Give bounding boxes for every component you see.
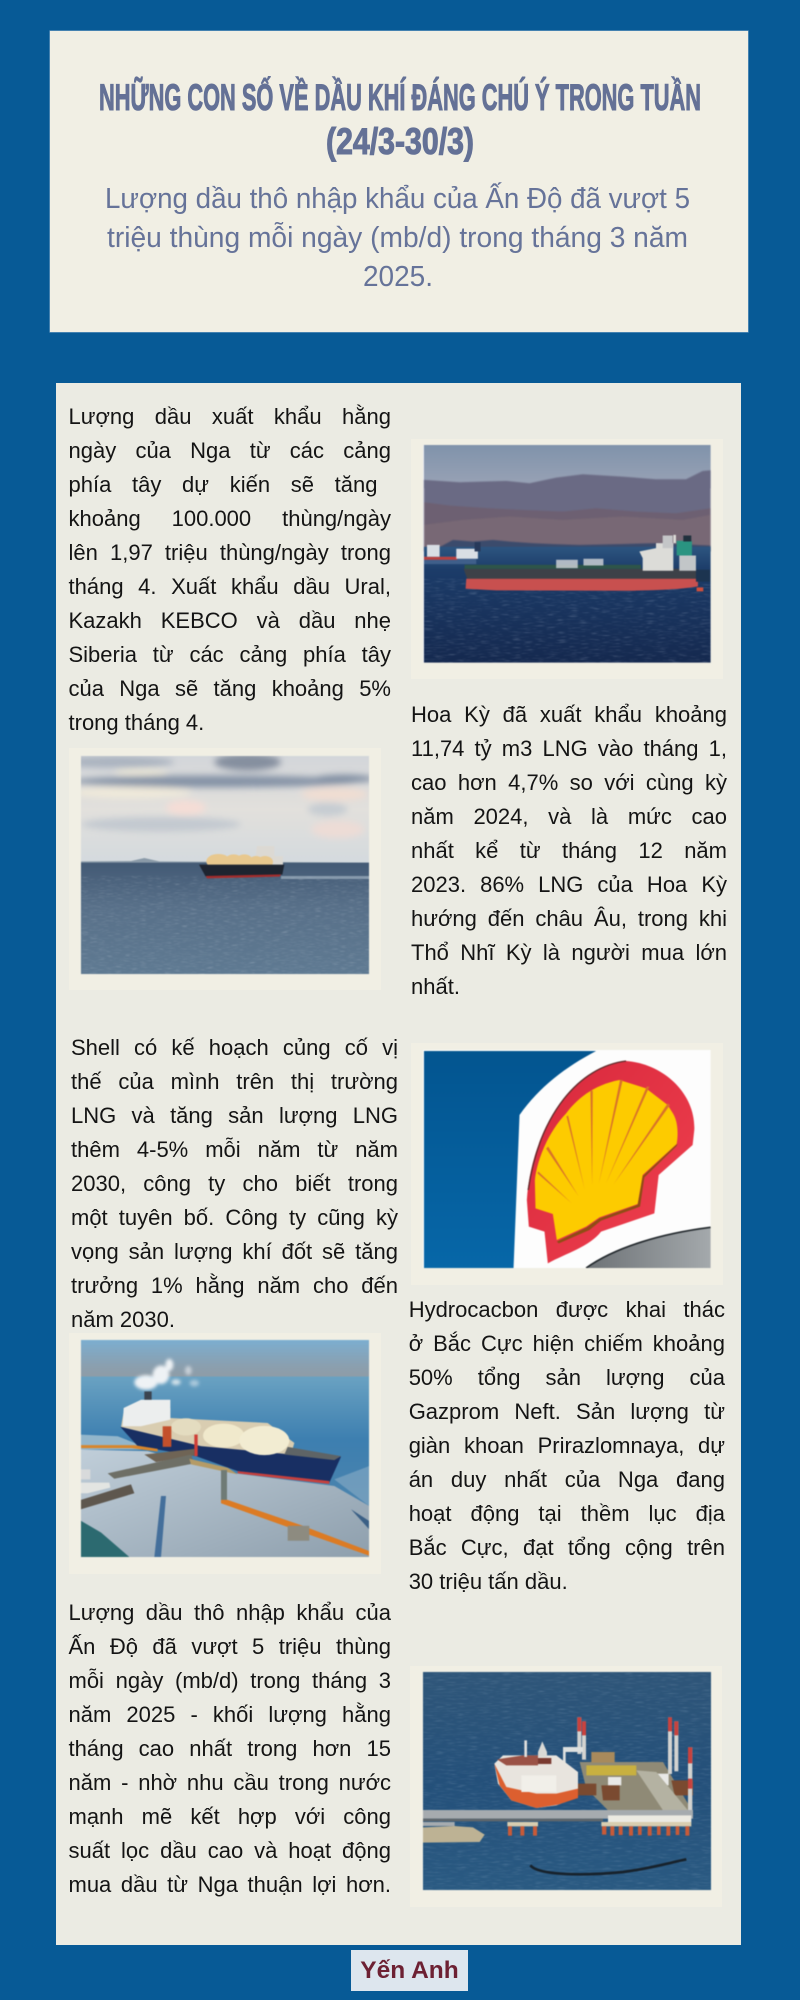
image: tanker at sea bbox=[411, 438, 723, 679]
carrier bbox=[120, 1427, 341, 1483]
image: LNG carrier under cloudy sky bbox=[68, 748, 381, 990]
image: offshore oil terminal bbox=[410, 1666, 722, 1907]
text block: US LNG exports: 2023. 86% LNG của Hoa Kỳ bbox=[411, 872, 727, 896]
text block: US LNG exports bbox=[411, 702, 727, 998]
subtitle: triệu thùng mỗi ngày (mb/d) trong tháng 3 năm bbox=[107, 221, 688, 254]
distant ships bbox=[424, 556, 477, 564]
text block: India crude imports: tháng cao nhất trong hơn 15 bbox=[68, 1736, 391, 1761]
signature bbox=[351, 1950, 468, 1991]
text block: Shell LNG plan: một tuyên bố. Công ty cũng kỳ bbox=[71, 1205, 398, 1230]
text block: Russia exports: lên 1,97 triệu thùng/ngày trong bbox=[68, 540, 391, 564]
jetty bbox=[81, 1445, 158, 1451]
subtitle bbox=[105, 181, 690, 293]
text block: India crude imports: Lượng dầu thô nhập khẩu của bbox=[68, 1600, 391, 1625]
text block: Russia exports: phía tây dự kiến sẽ tăng bbox=[68, 472, 378, 496]
panel: header bbox=[50, 30, 748, 332]
text block: Russia exports: ngày của Nga từ các cảng bbox=[68, 438, 391, 462]
text block: Russia exports: Lượng dầu xuất khẩu hằng bbox=[68, 404, 391, 428]
text block: US LNG exports: nhất kể từ tháng 12 năm bbox=[411, 838, 727, 862]
title: (24/3-30/3) bbox=[326, 120, 474, 162]
text block: Arctic hydrocarbons: Gazprom Neft. Sản lượng từ bbox=[409, 1398, 725, 1424]
text block: India crude imports: mạnh mẽ kết hợp với công bbox=[68, 1804, 391, 1829]
text block: Russia exports bbox=[68, 404, 391, 734]
text block: Arctic hydrocarbons: 50% tổng sản lượng của bbox=[409, 1364, 725, 1390]
text block: Arctic hydrocarbons: giàn khoan Prirazlomnaya, dự bbox=[409, 1432, 725, 1458]
image: Shell logo bbox=[411, 1043, 723, 1285]
text block: Arctic hydrocarbons: Hydrocacbon được khai thác bbox=[409, 1296, 725, 1322]
image: LNG carrier at icy terminal bbox=[68, 1333, 381, 1574]
panel: main content bbox=[56, 383, 741, 1945]
text block: Russia exports: tháng 4. Xuất khẩu dầu Ural, bbox=[68, 574, 391, 598]
text block: Arctic hydrocarbons: Bắc Cực, đạt tổng cộng trên bbox=[409, 1534, 725, 1560]
text block: Shell LNG plan: trưởng 1% hằng năm cho đến bbox=[71, 1273, 398, 1298]
heading block: title and subtitle bbox=[99, 76, 701, 293]
tanker hull bbox=[464, 569, 697, 581]
text block: US LNG exports: năm 2024, và là mức cao bbox=[411, 804, 727, 828]
text block: Shell LNG plan: năm 2030. bbox=[71, 1307, 175, 1332]
ice shelf bbox=[81, 1449, 369, 1557]
title bbox=[99, 76, 701, 162]
text block: Shell LNG plan: LNG và tăng sản lượng LNG bbox=[71, 1103, 398, 1128]
text block: Arctic hydrocarbons: ở Bắc Cực hiện chiếm khoảng bbox=[409, 1330, 725, 1356]
text block: Shell LNG plan: thêm 4-5% mỗi năm từ năm bbox=[71, 1137, 398, 1162]
text block: Russia exports: của Nga sẽ tăng khoảng 5% bbox=[68, 676, 391, 700]
subtitle: 2025. bbox=[363, 261, 433, 293]
text block: Arctic hydrocarbons: hoạt động tại thềm lục địa bbox=[409, 1500, 725, 1526]
text block: US LNG exports: 11,74 tỷ m3 LNG vào tháng 1, bbox=[411, 736, 727, 760]
text block: India crude imports: mỗi ngày (mb/d) trong tháng 3 bbox=[68, 1668, 391, 1693]
LNG ship bbox=[254, 846, 283, 866]
platform bbox=[580, 1762, 693, 1812]
trestle bbox=[423, 1810, 693, 1819]
text block: India crude imports: năm 2025 - khối lượng hằng bbox=[68, 1702, 391, 1727]
text block: India crude imports: suất lọc dầu cao và hoạt động bbox=[68, 1838, 391, 1863]
text block: India crude imports: Ấn Độ đã vượt 5 triệu thùng bbox=[68, 1634, 391, 1659]
text block: Arctic hydrocarbons bbox=[409, 1296, 725, 1594]
text block: US LNG exports: nhất. bbox=[411, 974, 460, 998]
text block: Arctic hydrocarbons: án duy nhất của Nga đang bbox=[409, 1466, 725, 1492]
text block: US LNG exports: Hoa Kỳ đã xuất khẩu khoảng bbox=[411, 702, 727, 726]
text block: Shell LNG plan: vọng sản lượng khí đốt sẽ tăng bbox=[71, 1239, 398, 1264]
text block: US LNG exports: cao hơn 4,7% so với cùng kỳ bbox=[411, 770, 727, 794]
text block: Russia exports: Kazakh KEBCO và dầu nhẹ bbox=[68, 608, 391, 632]
text block: India crude imports: năm - nhờ nhu cầu trong nước bbox=[68, 1770, 391, 1795]
tanker bbox=[494, 1755, 578, 1808]
text block: Russia exports: trong tháng 4. bbox=[68, 710, 204, 734]
text block: Russia exports: Siberia từ các cảng phía tây bbox=[68, 642, 391, 666]
text block: US LNG exports: hướng đến châu Âu, trong khi bbox=[411, 906, 727, 930]
text block: India crude imports bbox=[68, 1600, 391, 1897]
text block: US LNG exports: Thổ Nhĩ Kỳ là người mua lớn bbox=[411, 940, 727, 964]
text block: Arctic hydrocarbons: 30 triệu tấn dầu. bbox=[409, 1568, 568, 1594]
text block: Shell LNG plan: thế của mình trên thị trường bbox=[71, 1069, 398, 1094]
breakwater bbox=[423, 1826, 485, 1843]
signature: Yến Anh bbox=[360, 1957, 459, 1984]
shell emblem bbox=[527, 1061, 695, 1263]
text block: India crude imports: mua dầu từ Nga thuận lợi hơn. bbox=[68, 1872, 391, 1897]
text block: Russia exports: khoảng 100.000 thùng/ngày bbox=[68, 506, 391, 530]
steam bbox=[134, 1359, 199, 1390]
subtitle: Lượng dầu thô nhập khẩu của Ấn Độ đã vượt 5 bbox=[105, 181, 690, 215]
text block: Shell LNG plan: 2030, công ty cho biết trong bbox=[71, 1171, 398, 1196]
boom bbox=[530, 1859, 686, 1874]
masts bbox=[577, 1717, 692, 1812]
text block: Shell LNG plan bbox=[71, 1035, 398, 1332]
text block: Shell LNG plan: Shell có kế hoạch củng cố vị bbox=[71, 1035, 398, 1060]
